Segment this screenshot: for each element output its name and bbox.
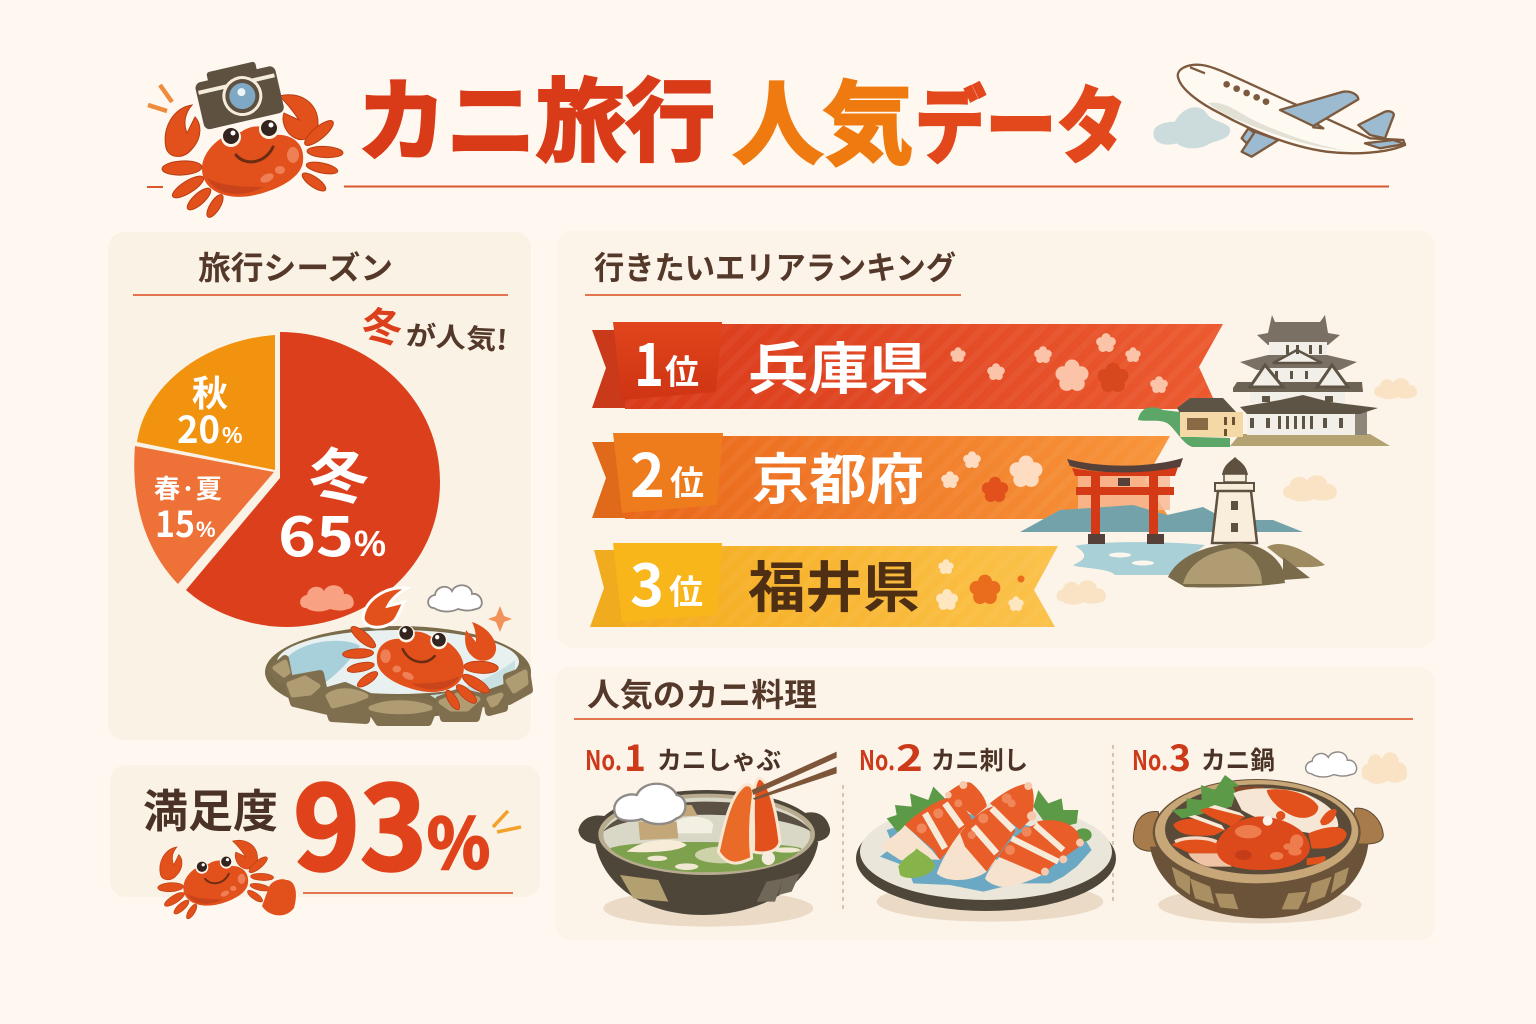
dish 2: kani sashimi bbox=[856, 730, 1116, 922]
label: spring summer: 15 bbox=[155, 496, 195, 548]
icon: torii and lighthouse bbox=[1020, 457, 1325, 588]
label: winter bbox=[278, 429, 386, 572]
panel: popular crab dishes bbox=[555, 667, 1435, 940]
title crab with camera bbox=[148, 57, 343, 220]
icon: shabu pot bbox=[578, 752, 837, 927]
label: spring summer bbox=[154, 469, 222, 548]
ribbon: rank 1: 1 bbox=[634, 319, 664, 403]
label: winter: % bbox=[354, 523, 386, 564]
ribbon: rank 2: 2 bbox=[630, 428, 665, 515]
icon: crab in hot spring bbox=[265, 585, 531, 722]
label: No.2: No. bbox=[859, 739, 895, 778]
icon: sashimi plate bbox=[856, 781, 1116, 922]
label: No.2: カニ刺し bbox=[931, 741, 1028, 777]
ribbon: rank 1: 兵庫県 bbox=[748, 325, 929, 406]
ribbon: rank 2: 位 bbox=[670, 456, 704, 505]
icon: castle bbox=[1138, 315, 1390, 447]
ribbon: rank 1: 位 bbox=[665, 345, 699, 394]
label: autumn: 秋 bbox=[192, 365, 228, 417]
ribbon: rank 2: 京都府 bbox=[752, 435, 924, 515]
value: 93% bbox=[293, 736, 490, 904]
ribbon: rank 1 bbox=[592, 319, 1223, 409]
title bbox=[357, 49, 1127, 182]
label: No.1: 1 bbox=[624, 730, 646, 782]
title: カニ旅行 bbox=[357, 49, 715, 179]
label: No.3 bbox=[1132, 730, 1275, 782]
ribbon: rank 3: 3 bbox=[630, 539, 664, 623]
label: No.2 bbox=[859, 730, 1028, 782]
callout: winter is popular: が人気! bbox=[405, 314, 509, 358]
panel: satisfaction bbox=[110, 736, 540, 920]
label: autumn: % bbox=[222, 422, 242, 448]
label: winter: 65 bbox=[278, 493, 354, 572]
label: No.3: No. bbox=[1132, 739, 1168, 778]
heading: area ranking: 行きたいエリアランキング bbox=[594, 243, 956, 289]
label: winter: 冬 bbox=[309, 429, 369, 516]
title: 人気 bbox=[733, 52, 913, 182]
callout: winter is popular: 冬 bbox=[361, 294, 404, 354]
title: データ bbox=[915, 60, 1127, 181]
icon: spark bbox=[493, 811, 521, 832]
label: No.2: 2 bbox=[896, 730, 923, 782]
heading: popular crab dishes: 人気のカニ料理 bbox=[587, 670, 817, 716]
heading: travel season: 旅行シーズン bbox=[198, 243, 393, 289]
pie chart bbox=[134, 332, 440, 627]
label: spring summer: % bbox=[196, 517, 216, 542]
icon: airplane bbox=[1153, 65, 1405, 157]
label: No.1 bbox=[585, 730, 781, 782]
icon: nabe pot bbox=[1133, 775, 1383, 923]
label: satisfaction: 満足度 bbox=[143, 775, 278, 840]
panel: travel season bbox=[108, 232, 531, 740]
panel: area ranking bbox=[557, 231, 1435, 648]
label: No.1: No. bbox=[585, 739, 622, 778]
label: autumn: 20 bbox=[177, 400, 220, 454]
ribbon: rank 3: 位 bbox=[669, 565, 703, 614]
callout: winter is popular bbox=[361, 294, 510, 360]
label: autumn bbox=[177, 365, 242, 454]
ribbon: rank 3: 福井県 bbox=[748, 543, 920, 623]
dish 3: kani nabe bbox=[1132, 730, 1407, 923]
icon: crab thumbs up bbox=[158, 840, 296, 920]
dish 1: kani shabu bbox=[578, 730, 837, 927]
label: No.3: カニ鍋 bbox=[1201, 741, 1275, 777]
icon: camera bbox=[193, 57, 285, 130]
title underline bbox=[147, 186, 1389, 188]
label: No.1: カニしゃぶ bbox=[657, 741, 781, 777]
label: spring summer: 春·夏 bbox=[154, 469, 222, 506]
ribbon: rank 3 bbox=[590, 539, 1058, 627]
value: 93%: % bbox=[427, 789, 490, 888]
label: No.3: 3 bbox=[1169, 730, 1191, 782]
ribbon: rank 2 bbox=[592, 428, 1170, 519]
value: 93%: 93 bbox=[293, 736, 427, 904]
icon: clouds bbox=[1057, 378, 1417, 605]
